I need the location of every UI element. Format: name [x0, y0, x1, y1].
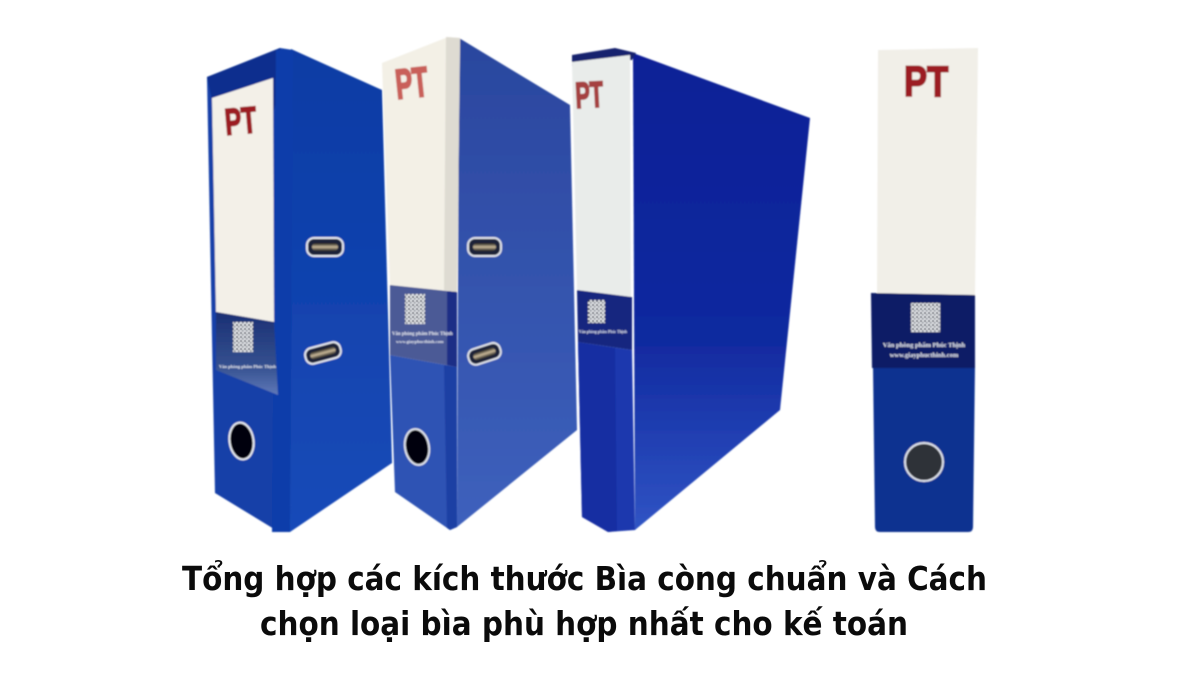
binder 4 lower blue spine — [873, 366, 975, 532]
binder 4 QR band — [871, 293, 975, 368]
binder 4 QR band: www.giayphucthinh.com — [890, 352, 959, 359]
binder 2 QR band: www.giayphucthinh.com — [396, 339, 444, 344]
binder 1: blue spine with white label — [207, 48, 392, 532]
binder 3 side cover — [633, 53, 810, 530]
binder 3 QR band: Văn phòng phẩm Phúc Thịnh — [579, 329, 628, 334]
title line 1: Tổng hợp các kích thước Bìa còng chuẩn và Cách — [182, 558, 987, 598]
binder 2 side cover — [457, 38, 577, 527]
binder 3 white spine — [572, 55, 631, 297]
binder 1 lower ring slot — [304, 341, 342, 365]
binder 3 spine top edge — [572, 48, 636, 66]
binder 2 upper ring slot — [468, 238, 501, 256]
binder 2 QR band: Văn phòng phẩm Phúc Thịnh — [392, 331, 453, 337]
binder 1 PT logo: PT — [223, 98, 258, 143]
binder 1 spine — [207, 48, 293, 532]
binder 4 white spine — [877, 48, 978, 295]
binder 3 PT logo: PT — [574, 75, 604, 116]
binder 2 QR band — [390, 285, 457, 367]
binder 2: white spine lighter blue cover — [382, 37, 577, 530]
binder 3: dark blue ring binder — [572, 48, 810, 532]
binder 2 lower spine — [390, 355, 457, 530]
binder 1 side cover — [290, 49, 392, 532]
binder 1 QR band: Văn phòng phẩm Phúc Thịnh — [219, 364, 276, 369]
binder 4 PT logo: PT — [904, 59, 948, 106]
binder 2 white spine — [382, 37, 460, 292]
binder 1 QR band — [216, 312, 278, 395]
binder 1 white label — [212, 78, 274, 322]
binder 1 finger hole — [227, 421, 256, 461]
title — [182, 558, 987, 643]
title line 2: chọn loại bìa phù hợp nhất cho kế toán — [260, 604, 908, 643]
binder 4 finger hole — [905, 443, 943, 481]
binder 3 lower spine — [578, 342, 635, 532]
binder 2 PT logo: PT — [393, 60, 430, 109]
binder 3 QR band — [577, 290, 632, 350]
binder 2 finger hole — [402, 427, 432, 467]
binder 4: front view of spine — [871, 48, 978, 532]
binder 1 upper ring slot — [307, 238, 343, 256]
binder 4 QR band: Văn phòng phẩm Phúc Thịnh — [883, 342, 966, 349]
binder 2 lower ring slot — [466, 341, 503, 367]
